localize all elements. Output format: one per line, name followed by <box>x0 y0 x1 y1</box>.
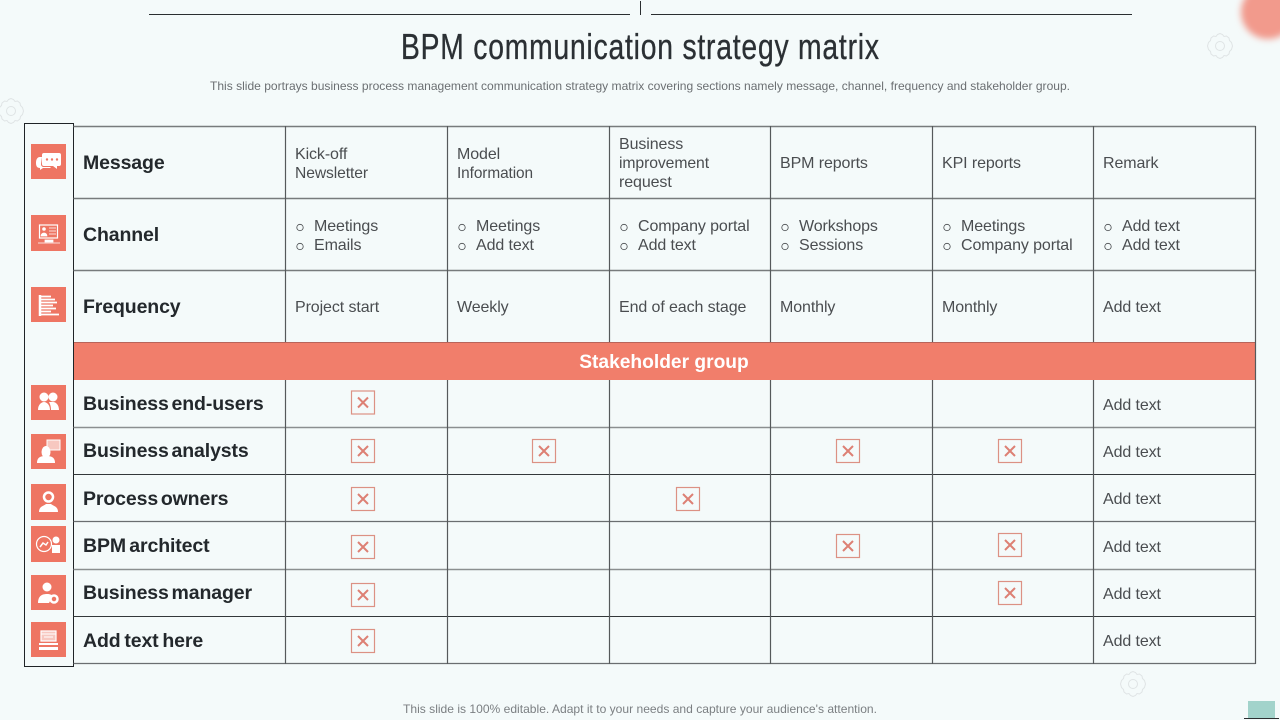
message row text: Information <box>457 165 533 182</box>
channel row lists: Meetings <box>961 218 1025 235</box>
subtitle: This slide portrays business process management communication strategy matrix covering sections namely message, channel, frequency and stakeholder group. <box>210 79 1070 93</box>
message row text <box>295 136 1160 191</box>
row headings: BPM architect <box>83 535 210 557</box>
remark column text: Add text <box>1103 491 1162 508</box>
frequency row text: Monthly <box>780 299 835 316</box>
icon: users <box>31 385 66 420</box>
cross marks <box>352 391 1022 652</box>
icon: architect <box>31 526 66 562</box>
icon: document list <box>31 287 66 322</box>
channel row lists: Add text <box>476 237 535 254</box>
stakeholder group banner: Stakeholder group <box>579 352 749 373</box>
message row text: Newsletter <box>295 165 369 182</box>
row headings: Business manager <box>83 582 253 604</box>
top rule <box>149 1 1132 15</box>
row headings: Business end-users <box>83 393 264 415</box>
channel row lists: Meetings <box>314 218 378 235</box>
frequency row text: Add text <box>1103 299 1162 316</box>
message row text: improvement <box>619 155 710 172</box>
title: BPM communication strategy matrix <box>401 27 879 67</box>
gear icon bottom right <box>1120 672 1146 696</box>
frequency row text: Project start <box>295 299 380 316</box>
icon column frame <box>24 124 74 666</box>
stakeholder group banner <box>74 342 1255 380</box>
icon: process owner <box>31 484 66 520</box>
message row text: Model <box>457 146 500 163</box>
corner tab <box>1244 701 1279 718</box>
remark column text: Add text <box>1103 539 1162 556</box>
channel row lists: Emails <box>314 237 362 254</box>
channel row lists: Add text <box>1122 237 1181 254</box>
channel row lists <box>297 218 1181 254</box>
channel row lists: Sessions <box>799 237 863 254</box>
icon: monitor <box>31 215 66 251</box>
channel row lists: Meetings <box>476 218 540 235</box>
remark column text: Add text <box>1103 397 1162 414</box>
decorative corner circle <box>1241 0 1280 39</box>
remark column text <box>1103 397 1162 650</box>
message row text: BPM reports <box>780 155 868 172</box>
channel row lists: Company portal <box>961 237 1073 254</box>
icon: message bubbles <box>31 144 66 179</box>
icon: analyst with chart <box>31 434 66 469</box>
channel row lists: Workshops <box>799 218 878 235</box>
footer note: This slide is 100% editable. Adapt it to your needs and capture your audience's attention. <box>403 702 877 716</box>
row headings: Channel <box>83 224 159 246</box>
frequency row text <box>295 299 1162 316</box>
frequency row text: End of each stage <box>619 299 746 316</box>
remark column text: Add text <box>1103 633 1162 650</box>
frequency row text: Monthly <box>942 299 997 316</box>
gear icon top right <box>1208 34 1232 58</box>
remark column text: Add text <box>1103 586 1162 603</box>
channel row lists: Add text <box>638 237 697 254</box>
remark column text: Add text <box>1103 444 1162 461</box>
message row text: Remark <box>1103 155 1160 172</box>
message row text: Kick-off <box>295 146 348 163</box>
message row text: request <box>619 174 672 191</box>
frequency row text: Weekly <box>457 299 509 316</box>
gear icon left <box>0 98 24 124</box>
channel row lists: Company portal <box>638 218 750 235</box>
icon: keyboard desk <box>31 622 66 657</box>
row headings: Message <box>83 152 165 174</box>
row headings: Process owners <box>83 488 229 510</box>
channel row lists: Add text <box>1122 218 1181 235</box>
row headings: Frequency <box>83 296 181 318</box>
row headings: Business analysts <box>83 440 249 462</box>
message row text: Business <box>619 136 683 153</box>
row headings <box>83 152 264 652</box>
row headings: Add text here <box>83 630 203 652</box>
message row text: KPI reports <box>942 155 1021 172</box>
matrix grid <box>74 126 1256 664</box>
icon: manager with gear <box>31 575 66 610</box>
